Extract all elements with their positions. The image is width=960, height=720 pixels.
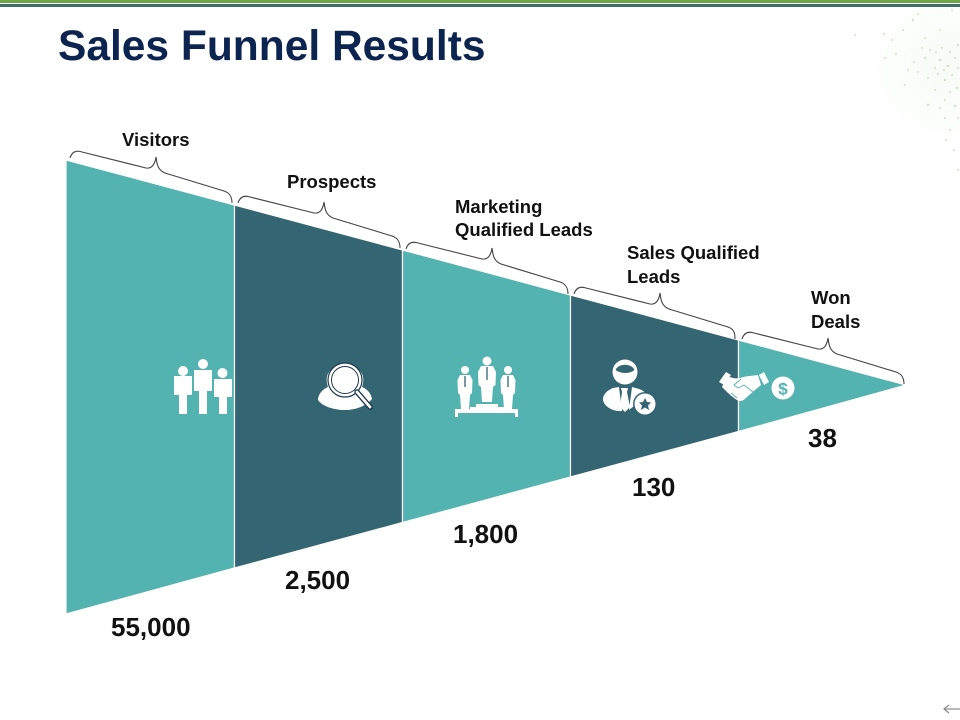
segment: prospects xyxy=(234,205,402,568)
segment: visitors xyxy=(66,160,234,614)
speckle decoration xyxy=(850,7,960,177)
icon: back arrow xyxy=(944,705,960,713)
title: Sales Funnel Results xyxy=(58,23,486,70)
brace: visitors xyxy=(70,151,232,203)
segment: won deals xyxy=(738,340,906,432)
label: marketing qualified leads: Marketing xyxy=(455,196,542,217)
brace: sales qualified leads xyxy=(574,287,735,339)
icon: people xyxy=(174,359,232,414)
label: won deals: Deals xyxy=(811,311,860,332)
icon: businessman with star xyxy=(603,360,657,416)
segment: marketing qualified leads xyxy=(402,250,570,522)
label: prospects: Prospects xyxy=(287,171,376,192)
label: won deals: Won xyxy=(811,287,851,308)
brace: prospects xyxy=(238,196,400,248)
label: sales qualified leads: Sales Qualified xyxy=(627,242,760,263)
icon: magnifier over people xyxy=(318,363,372,410)
label: sales qualified leads: Leads xyxy=(627,266,680,287)
label: marketing qualified leads: Qualified Leads xyxy=(455,219,593,240)
value: sales qualified leads: 130 xyxy=(632,472,675,502)
value: visitors: 55,000 xyxy=(111,612,191,642)
segment: sales qualified leads xyxy=(570,295,738,477)
brace: marketing qualified leads xyxy=(406,242,568,294)
icon: handshake and dollar xyxy=(719,372,794,401)
value: prospects: 2,500 xyxy=(285,565,350,595)
label: visitors: Visitors xyxy=(122,129,190,150)
value: marketing qualified leads: 1,800 xyxy=(453,519,518,549)
top stripes xyxy=(0,0,960,7)
funnel xyxy=(66,160,906,614)
icon: handshake and dollar: $ xyxy=(778,380,788,398)
icon: podium xyxy=(455,356,518,417)
brace: won deals xyxy=(742,332,904,384)
value: won deals: 38 xyxy=(808,423,837,453)
